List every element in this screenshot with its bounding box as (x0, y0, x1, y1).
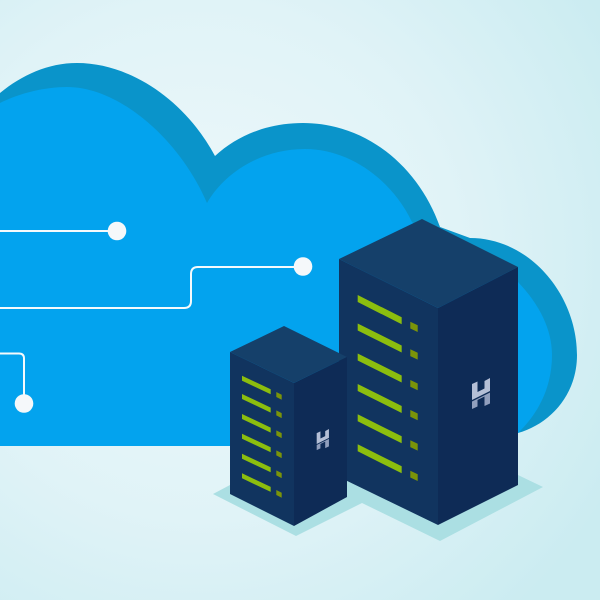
circuit line 1 (0, 222, 126, 240)
large server: status bars (358, 295, 402, 473)
circuit line 3 (0, 354, 33, 413)
ground shadow (213, 400, 543, 541)
large server: status lights (410, 322, 418, 481)
cloud: back layer (0, 63, 577, 446)
small server: right face (294, 357, 347, 526)
large server: top face (339, 219, 518, 308)
small server (230, 326, 347, 526)
small server: top face (230, 326, 347, 383)
circuit line 2 (0, 257, 312, 308)
large server: logo (472, 378, 490, 409)
large server: right face (438, 267, 518, 525)
small server: logo (317, 429, 329, 450)
small server: left face (230, 352, 294, 526)
large server: left face (339, 259, 438, 525)
small server: status bars (242, 376, 271, 492)
small server: status lights (276, 392, 282, 498)
large server (339, 219, 518, 525)
cloud: front layer (0, 87, 552, 446)
